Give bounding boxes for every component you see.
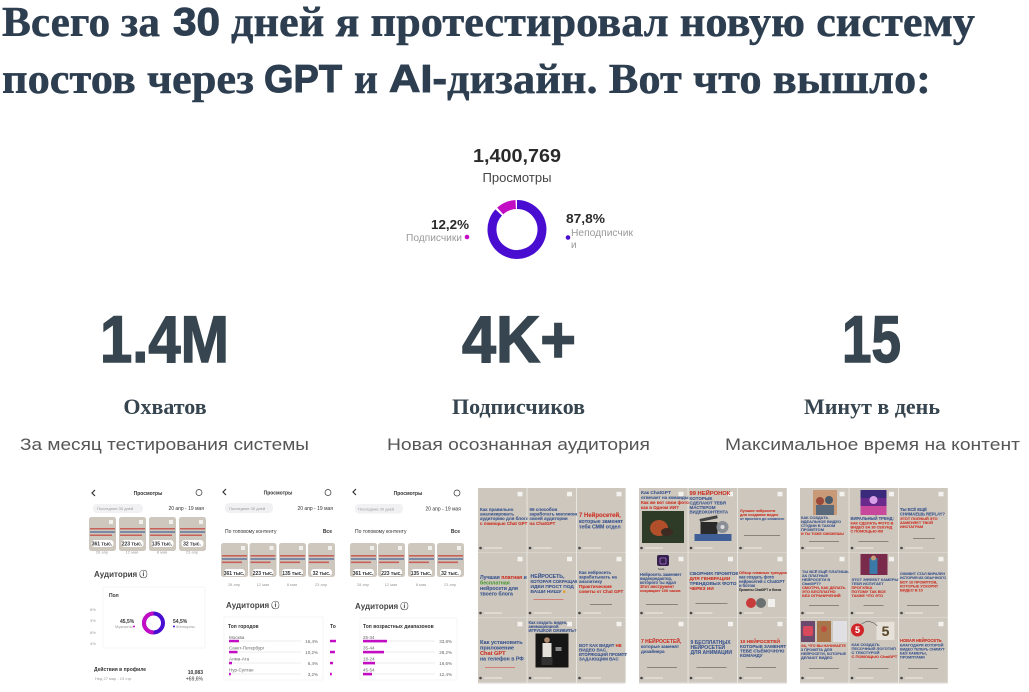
screenshot: top cities audience: 361 тыс. [224,571,245,577]
post grid 1: твоего блога [480,590,513,598]
screenshot: top cities audience: Последние 30 дней [229,506,265,511]
post grid 3: ПРОМПТОМ [801,527,824,532]
post grid 2: которого ты ждал [640,580,677,585]
post grid 2: Нейросеть заменяет [640,572,682,577]
post grid 3: С ПОМОЩЬЮ ИИ [850,530,883,534]
title: постов через [2,57,254,103]
screenshot: views and gender audience: 361 тыс. [92,542,113,548]
screenshot: top cities audience: 3,2% [308,672,318,677]
screenshot: views and gender audience: 8% [90,630,96,635]
screenshot: top age ranges: 12 мая [385,582,397,587]
post grid 3: ВОТ 10 ПРОМПТОВ, [900,580,937,584]
stat: minutes: 15 [842,302,901,376]
post grid 2: Обзор главных трендов [739,570,787,575]
post grid 3: КОТОРЫЕ УСКОРЯТ [900,584,939,588]
screenshot: top age ranges: 25-34 [363,635,375,640]
post grid 2: Как ChatGPT [641,490,671,496]
post grid 2 [639,488,787,684]
post grid 1: своей аудитории [530,515,568,521]
screenshot: top cities audience [221,489,336,680]
screenshot: top age ranges: По топовому контенту [355,529,407,535]
screenshot: top age ranges: 35-44 [363,646,375,650]
post grid 2: ТРЕНДОВЫХ ФОТО [690,581,737,587]
post grid 3: ВИДЕО ТЕПЕРЬ СНИМУТ [900,648,945,652]
post grid 3: БЛАГОДАРЯ КОТОРОЙ [900,644,944,648]
stat: subscribers: Новая осознанная аудитория [387,435,650,454]
screenshot: top cities audience: 23 апр [315,582,328,587]
post grid 3: ЭТОТ ЭФФЕКТ КАМЕРЫ [852,577,898,582]
stat: reach [20,302,309,454]
post grid 2: СБОРНИК ПРОМТОВ [690,571,739,577]
post grid 2: ЧЕРЕЗ ИИ [690,586,714,592]
screenshot: top cities audience: Москва [229,635,245,640]
post grid 3: ВИРАЛЬНЫЙ ТРЕНД: [850,516,894,521]
post grid 1: на ChatGPT [530,521,555,526]
screenshot: top cities audience: Просмотры [264,490,292,496]
post grid 3: ТЫ ВСЁ ЕЩЁ ПЛАТИШЬ [802,569,849,574]
stat: minutes: Минут в день [804,394,940,419]
stat: minutes [725,302,1020,454]
screenshot: views and gender audience: Женщины [176,624,195,629]
screenshot: views and gender audience: 10,083 [188,670,203,676]
post grid 3: ДЕЛАЮТ ВИДЕО [801,656,833,660]
screenshot: top cities audience: 135 тыс. [282,571,303,577]
post grid 2: сокращает 100 часов [640,588,681,593]
post grid 1: ВОТ КАК ВИДИТ НЕ [579,643,622,648]
post grid 1: анимационной [528,624,559,629]
post grid 2: как создать фото [739,574,775,580]
post grid 1: приложение [480,646,514,652]
post grid 3: С ПОМОЩЬЮ ChatGPT [852,654,898,659]
screenshot: top cities audience: Нур-Султан [229,668,254,672]
screenshot: top age ranges: 23 апр [444,582,457,587]
screenshot: top age ranges: 16,6% [439,661,452,666]
screenshot: views and gender audience: Просмотры [134,491,162,497]
post grid 2: отвечает на команды? [641,495,691,500]
screenshot: top cities audience: Алма-Ата [229,656,250,662]
title: Всего за [2,0,160,46]
post grid 2: НЕЙРОСЕТЕЙ [690,643,726,651]
post grid 3 [800,488,948,684]
screenshot: top cities audience: 10,2% [305,650,318,655]
screenshot: top cities audience: 6,4% [308,661,318,666]
post grid 1: Chat GPT [480,651,506,657]
stat: subscribers: 4K+ [462,302,576,376]
post grid 3: И ТЫ ТОЖЕ СМОЖЕШЬ! [801,532,844,536]
post grid 1: Как правильно [480,507,514,512]
post grid 3: 5 [855,625,860,635]
screenshot: views and gender audience [89,490,206,682]
post grid 1: 7 Нейросетей, [579,512,621,519]
post grid 2: видеоредактор, [640,576,672,581]
post grid 3: ПРОМПТАМИ [900,656,925,660]
screenshot: top cities audience: Топ городов [228,624,259,630]
views donut chart: и [571,240,577,251]
views donut chart: Просмотры [482,170,552,185]
post grid 3: БЕЗ КАМЕРЫ, [900,652,927,656]
screenshot: top age ranges: Все [451,529,460,535]
post grid 3: ИДЕАЛЬНОЕ ВИДЕО [801,519,841,524]
screenshot: top cities audience: 12 мая [257,582,269,587]
post grid 3: НОВАЯ НЕЙРОСЕТЬ [900,638,942,643]
screenshot: views and gender audience: 8 мая [157,550,167,554]
post grid 2: КОТОРЫЕ ЗАМЕНЯТ [740,644,786,649]
screenshot: views and gender audience: 45,5% [120,619,135,625]
post grid 2: ДЛЯ ГЕНЕРАЦИИ [690,576,731,582]
title: дизайн. Вот что вышло: [447,57,931,103]
post grid 3: ВИДЕО ЗА 30 СЕКУНД [850,526,892,530]
screenshot: views and gender audience: Пол [109,593,119,599]
screenshot: views and gender audience: 135 тыс. [152,542,173,548]
title [2,0,975,103]
screenshot: views and gender audience: 8% [90,607,96,612]
post grid 2: для создания видео [740,513,779,517]
post grid 3: ПЕСОЧНЫЙ ЛОГОТИП [852,646,896,651]
post grid 3: 5 [882,623,890,639]
screenshot: views and gender audience: 20 апр - 19 мая [168,506,204,512]
post grid 1: анализировать [480,512,514,516]
screenshot: views and gender audience: Последние 30 дней [97,506,133,511]
post grid 1: ИГРУШКОЙ ОЖИВИТЬ? [528,628,577,633]
screenshot: views and gender audience: 23 апр [186,550,199,554]
screenshot: top age ranges: 18-24 [363,656,375,662]
post grid 3: НЕЙРОСЕТИ, КОТОРЫЕ [801,652,847,656]
screenshot: top cities audience: Санкт-Петербург [229,646,265,650]
post grid 3: ЗА ПЛАТНЫЕ [802,573,828,578]
post grid 2: как в Одном ИИ? [641,505,679,510]
post grid 1: ЗАДАЮЩИМ ВАС [579,656,619,662]
post grid 3: СМОТРИ, КАК ДЕЛАТЬ [802,585,846,590]
post grid 2: СДЕЛАЮТ ТЕБЯ [690,500,726,506]
post grid 3: ОЖИВИТ СТАЛ ВИРАЛЕН [900,572,945,576]
screenshot: top cities audience: 223 тыс. [253,571,274,577]
screenshot: top cities audience: По топовому контенту [225,529,277,535]
post grid 2: ДЛЯ АНИМАЦИИ [690,650,732,656]
post grid 2: 9 БЕСПЛАТНЫХ [690,640,731,646]
post grid 1: с помощью Chat GPT [480,521,528,526]
post grid 2: 10 НЕЙРОСЕТЕЙ [740,637,780,645]
screenshot: top age ranges: 28,2% [439,650,452,655]
post grid 3: С ТЕКСТУРОЙ [852,650,879,655]
post grid 3: ЭТОТ ПОЛНЫЙ ЭТО [900,517,938,521]
screenshot: top age ranges: Топ возрастных диапазонов [363,624,434,630]
screenshot: top cities audience: 28 апр [228,582,241,587]
post grid 3: КАК СОЗДАТЬ [801,515,829,520]
post grid 1: ВАШИ НИШУ ■ [530,589,566,595]
screenshot: top age ranges: 33,8% [439,639,452,644]
post grid 2: нейросетей с ChatGPT [739,579,785,584]
post grid 1: Как нейросеть [579,569,611,575]
post grid 1: аудиторию для блога [480,515,529,521]
post grid 2: Лучшие нейросети [740,509,776,513]
screenshot: views and gender audience: 32 тыс. [183,542,202,548]
screenshot: views and gender audience: 12 мая [126,550,138,554]
post grid 2: дизайнера [641,648,665,654]
title: 30 [173,1,220,44]
screenshot: top age ranges: Последние 30 дней [358,506,394,512]
post grid 3: СТУДИИ В ТАКОМ [801,523,835,528]
post grid 3: ТАКЖЕ ЧТО ЭТО [852,593,883,598]
post grid 1: на телефон в РФ [480,656,524,662]
screenshot: top age ranges: 135 тыс. [411,571,432,577]
screenshot: top cities audience: Все [323,529,332,535]
screenshot: top cities audience: 8 мая [287,582,297,587]
post grid 1: ИДЕИ ПРОСТ ПОД [530,584,574,590]
views donut chart: 87,8% [566,211,605,226]
post grid 1: Практические [579,584,612,590]
screenshot: top age ranges: 20 апр - 19 мая [425,506,461,512]
post grid 1: нейросети для [480,585,518,592]
post grid 3: ВИДЕО В 10 [900,588,923,592]
screenshot: top age ranges: 8 мая [416,582,426,587]
post grid 3: ИСТОРИЯ ИЗ ОБЫЧНОГО [900,576,946,580]
post grid 2: КОТОРЫЕ [690,496,712,501]
views donut chart: 12,2% [431,217,469,232]
post grid 3: ТЕБЯ ИСПУГАЕТ [852,581,884,586]
screenshot: views and gender audience: 4% [90,641,96,646]
screenshot: top age ranges [350,489,464,680]
post grid 1: 99 способов [530,506,557,512]
post grid 1: Как установить [480,640,523,646]
screenshot: top age ranges: Просмотры [394,491,422,497]
post grid 2: ВИДЕОКОНТЕНТА [690,510,728,514]
post grid 1: бесплатная [480,580,510,586]
post grid 3: ПОТОМУ ТАК ВСЕ [852,589,886,594]
post grid 3: ТЫ ВСЁ ЕЩЁ [900,507,927,512]
post grid 3: ЭТО БЕСПЛАТНО [802,589,836,594]
screenshot: top age ranges: 223 тыс. [381,571,402,577]
post grid 3: ПРОГУЛКА [852,585,872,590]
post grid 2: 99 НЕЙРОНОК [690,489,731,497]
post grid 1: советы от Chat GPT [579,589,624,594]
post grid 3: ИНСТАГРАМ [900,525,923,529]
post grid 3: 3 ПРОМПТА ДЛЯ [801,648,832,652]
post grid 2: Как же вот свои фото, [641,499,690,505]
stat: reach: Охватов [123,394,207,419]
stat: minutes: Максимальное время на контент [725,435,1020,454]
post grid 3: КАК СОЗДАТЬ [852,642,880,647]
title: AI- [389,58,447,101]
post grid 3: ЗАМЕНЯЕТ ТВОЙ [900,521,933,525]
post grid 1: заработать миллионы [530,510,580,516]
post grid 2: 7 НЕЙРОСЕТЕЙ, [641,637,682,645]
post grid 2: Soda [658,567,665,571]
screenshot: views and gender audience: 54,5% [173,619,188,625]
post grid 1: Лучшая платная и [480,575,527,581]
views donut chart: Подписчики [406,233,462,244]
screenshot: top age ranges: 32 тыс. [441,571,460,577]
screenshot: top cities audience: 20 апр - 19 мая [297,506,333,512]
post grid 2: Промпты ChatGPT и ботов [739,588,781,592]
post grid 3: ЭА, ЧТО ВЫ НАЧИНАЕТЕ [801,644,846,648]
post grid 3: НЕЙРОСЕТИ В [802,577,830,582]
views donut chart [406,146,634,254]
post grid 2: КОМАНДУ [740,653,763,658]
title: и [354,57,378,103]
stat: subscribers: Подписчиков [452,394,585,419]
post grid 1: КОТОРАЯ СОКРАЩАЕТ [530,579,581,584]
post grid 2: Этот инструмент [640,584,674,589]
post grid 3: БЕЗ ОГРАНИЧЕНИЙ [802,593,841,598]
post grid 1 [478,488,628,684]
title: дней я протестировал новую систему [231,0,975,46]
stat: reach: 1.4M [100,302,229,376]
screenshot: views and gender audience: Нед 27 мар - 19 стр [95,676,132,681]
screenshot: top age ranges: Аудитория ⓘ [355,601,408,611]
post grid 1: которые заменят [579,519,623,525]
screenshot: views and gender audience: Мужчины [115,624,133,629]
post grid 1: ВИДЕО ВАС [579,648,607,652]
post grid 2: которые заменят [641,644,680,649]
screenshot: views and gender audience: 223 тыс. [122,542,143,548]
screenshot: top age ranges: 12,4% [439,672,452,677]
screenshot: views and gender audience: 28 апр [96,550,109,554]
views donut chart: 1,400,769 [473,146,561,166]
screenshot: top cities audience: 32 тыс. [313,571,331,577]
screenshot: top age ranges: 361 тыс. [353,571,374,577]
post grid 3: ChatGPT? [802,581,822,586]
title: GPT [264,58,342,101]
views donut chart: Неподписчик [571,228,634,239]
post grid 1: аналитику [579,579,603,584]
post grid 3: КАК СДЕЛАТЬ ФОТО В [850,522,894,526]
screenshot: views and gender audience: Аудитория ⓘ [94,569,147,579]
screenshot: views and gender audience: 3% [90,618,96,623]
post grid 2: ТЕБЕ СЪЁМОЧНУЮ [740,648,785,654]
post grid 1: НЕЙРОСЕТЬ, [530,572,565,580]
post grid 1: Как создать видео, [528,620,567,625]
screenshot: views and gender audience: +69,6% [186,676,204,682]
post grid 2: и ботом [739,583,755,588]
screenshot: top cities audience: То [330,624,336,630]
post grid 2: МАСТЕРОМ [690,505,716,510]
post grid 2: от простого до сложного [740,517,785,521]
stat: reach: За месяц тестирования системы [20,435,309,454]
screenshot: top age ranges: 28 апр [357,582,370,587]
screenshot: top cities audience: Аудитория ⓘ [226,600,279,610]
post grid 1: тебя СММ отдел [579,524,621,530]
screenshot: top cities audience: 16,4% [305,639,318,644]
screenshot: top age ranges: 45-54 [363,668,375,672]
post grid 1: зарабатывать на [579,574,617,580]
post grid 1: ВТОРЯЮЩИЙ ПРОМПТ [579,652,628,657]
post grid 3: СНИМАЕШЬ REPLAY? [900,512,945,516]
screenshot: views and gender audience: Действия в профиле [94,666,146,673]
stat: subscribers [387,302,650,454]
